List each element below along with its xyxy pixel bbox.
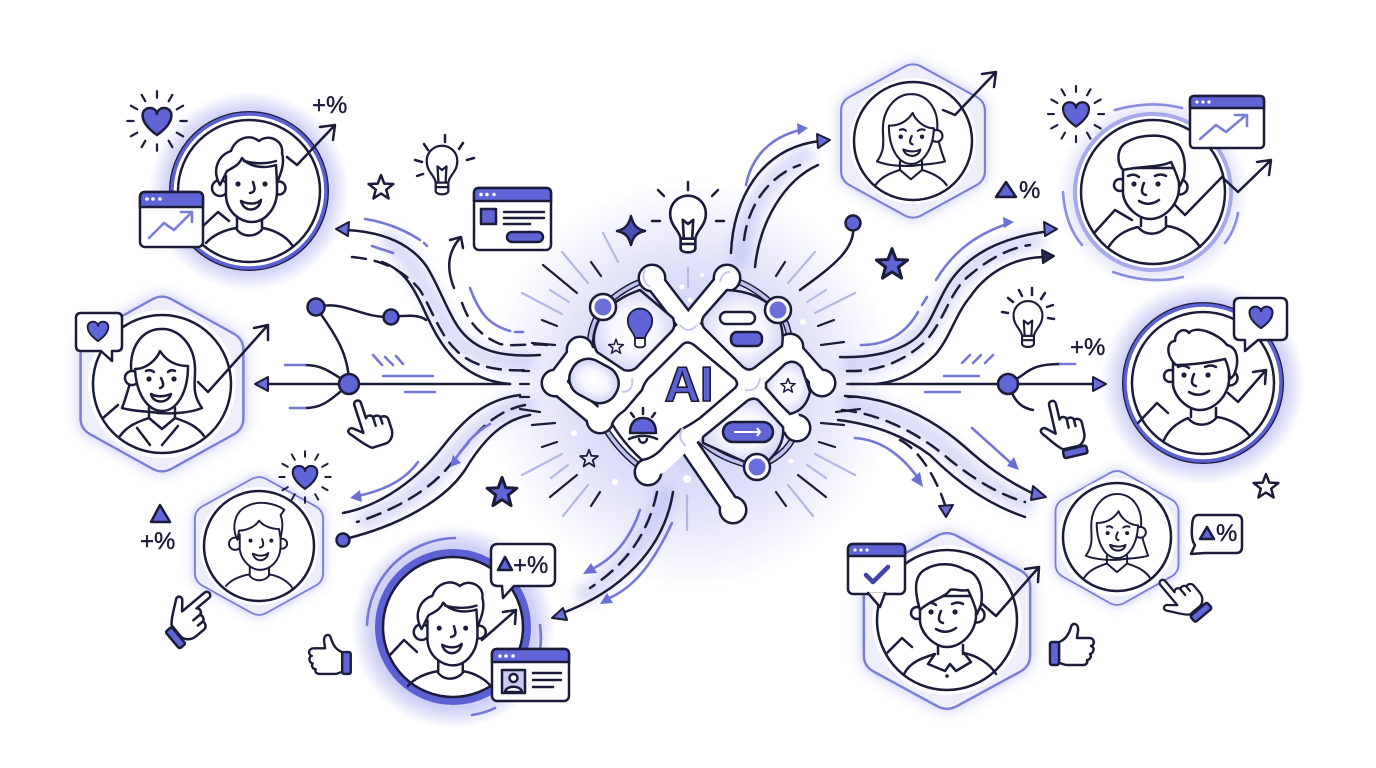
person: top left [140,112,335,270]
icon: hand right [1035,396,1089,462]
cell: left oval [563,352,625,410]
icon: star right [1254,474,1278,498]
icon: triangle and plus percent: +% [140,528,175,555]
icon: heart with rays lower left [279,451,331,503]
face [1108,136,1200,248]
person: top right [1063,96,1271,280]
person: bottom [367,538,569,715]
outer ring arcs [590,278,797,472]
core fill [600,325,752,472]
bubble: +% [513,552,548,579]
central AI network [541,264,836,524]
text: plus percent: +% [312,92,347,119]
cell: top right [702,290,783,370]
person: lower left hexagon [195,477,323,615]
icon: heart speech bubble left [76,313,122,361]
tube fill [544,266,834,522]
person: bottom right hexagon [864,533,1039,709]
icon: triangle and plus percent [140,505,175,555]
icon: heart with rays top left [127,91,187,151]
person: top centre hexagon [841,64,996,218]
icon: hand lower right [1149,566,1212,632]
icon: star below left burst [580,450,598,467]
icon: bulb upper left [415,135,474,194]
icon: star [369,175,393,198]
tube outline [541,264,836,524]
sparkles [571,273,806,485]
icon: percent speech bubble [1191,515,1242,554]
icon: check bubble window [848,544,905,607]
icon: thumbs up left [309,635,351,674]
chart window [1190,96,1264,148]
profile window [492,649,569,701]
icon: pill button [723,422,773,442]
window chart [140,192,203,247]
purple nodes [590,294,791,480]
flow lines: upper centre right [731,123,860,290]
icon: small bulb [628,309,652,347]
cell: star [766,362,810,414]
text: plus percent right: +% [1070,334,1105,361]
icon: purple star lower [487,477,517,506]
cell: top left [594,290,674,371]
bubble heart [1234,298,1287,351]
flow lines: left network and arrow [255,298,510,408]
icon: star [609,339,623,353]
person: right [1123,298,1287,463]
flow lines: upper right [840,217,1057,384]
person: left hexagon [81,297,268,471]
icon: sparkle star [617,216,645,245]
person: lower right hexagon [1056,471,1178,605]
background glows [149,91,1305,729]
flow lines: lower left [336,395,530,546]
icon: hand left [340,393,395,453]
icon: pointing hand lower left [153,580,225,650]
icon: top bulb [652,182,724,252]
radiating burst lines [520,233,860,530]
icon: window upper left centre [474,188,551,250]
icon: triangle percent top [996,177,1040,204]
interior corridor fill [592,336,788,462]
face [1164,330,1249,440]
icon: star right [781,378,795,392]
icon: bulb right [1002,288,1054,347]
icon: heart with rays top right [1048,86,1104,142]
cell: bottom right [703,399,783,462]
flow lines: right network and arrow [850,355,1106,410]
flow lines: upper left [336,219,547,384]
icon: thumbs up right [1050,624,1094,665]
AI label: AI [664,358,714,412]
face [904,564,996,678]
icon: chat bubbles [720,312,762,346]
flow lines: bottom [552,492,673,620]
icon: purple star [876,249,908,278]
bubble [491,544,555,598]
junction highlights [622,270,760,446]
icon: triangle percent top: % [1019,177,1040,204]
icon: percent speech bubble: % [1216,520,1237,547]
cell: AI and bell [612,342,737,460]
icon: bell [629,408,657,443]
flow lines: lower right [838,396,1046,517]
